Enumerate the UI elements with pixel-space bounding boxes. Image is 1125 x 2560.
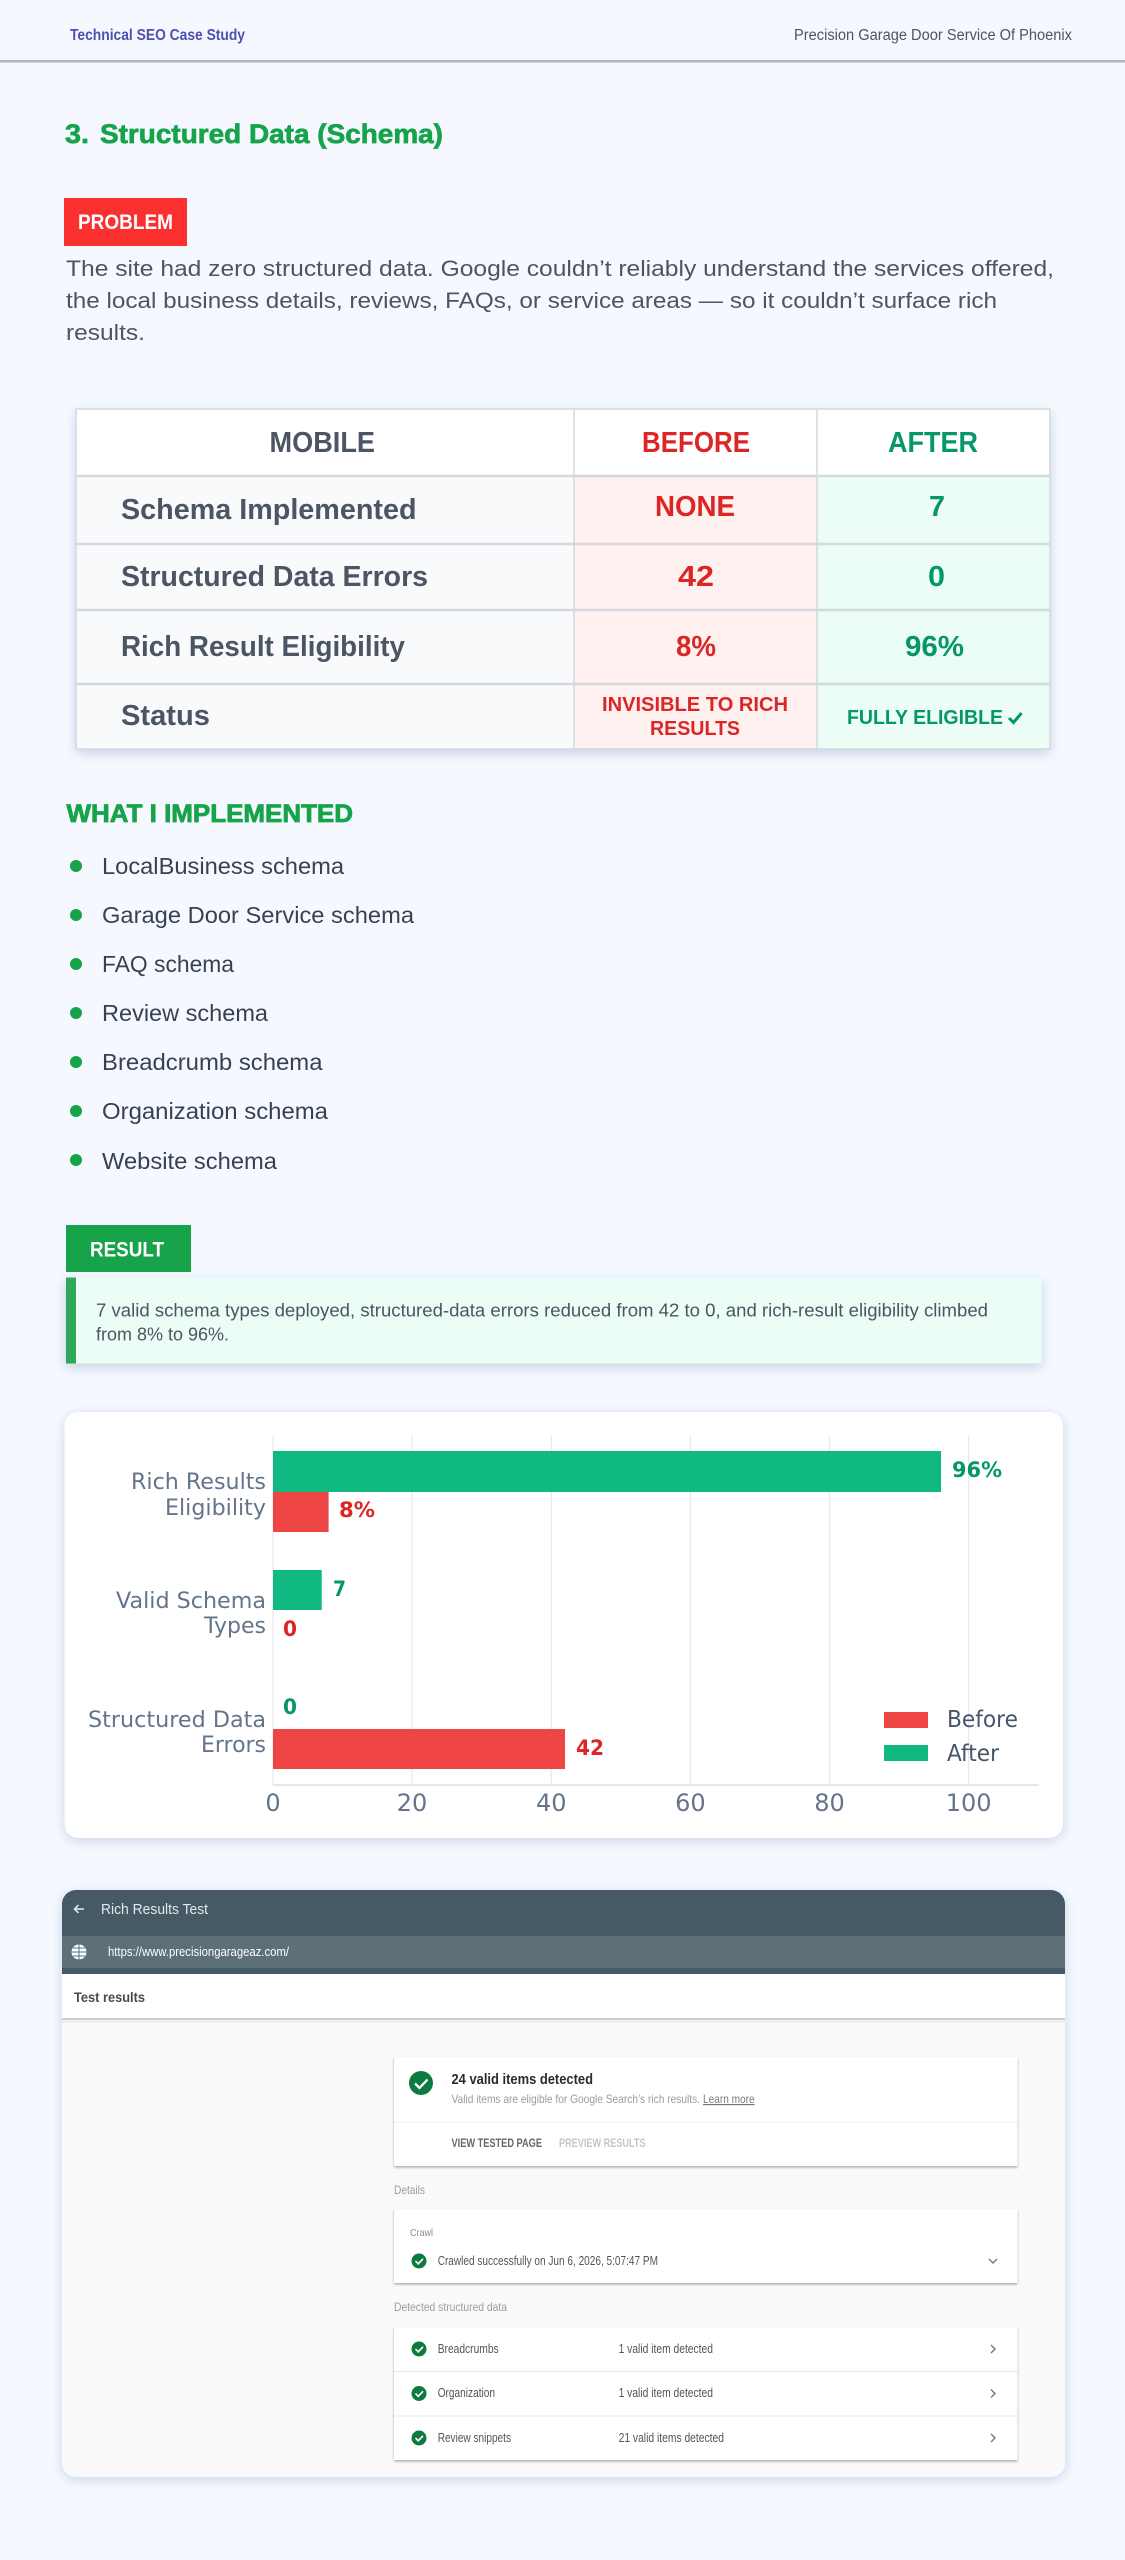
category axis labels: Valid Schema <box>116 1589 266 1614</box>
implemented list: Garage Door Service schema <box>102 902 414 928</box>
summary card: 24 valid items detected <box>452 2071 593 2088</box>
section title: 3. <box>65 119 89 149</box>
bar value labels: 0 <box>283 1617 297 1641</box>
row: breadcrumbs <box>412 2342 995 2356</box>
row: organization <box>412 2386 995 2401</box>
header label: client: Precision Garage Door Service Of Phoenix <box>794 27 1072 44</box>
bar value labels: 96% <box>952 1458 1002 1482</box>
value axis ticks: 100 <box>946 1789 992 1817</box>
value axis ticks <box>265 1789 992 1817</box>
detected data label: Detected structured data <box>394 2300 507 2314</box>
result badge <box>66 1225 191 1272</box>
bar value labels: 42 <box>576 1736 604 1760</box>
category axis labels: Structured Data <box>88 1708 266 1733</box>
row: schema implemented: Schema Implemented <box>121 494 416 526</box>
legend <box>884 1707 1018 1767</box>
implemented list: LocalBusiness schema <box>102 853 344 879</box>
crawl card <box>394 2209 1018 2283</box>
section title: Structured Data (Schema) <box>100 119 443 149</box>
crawl card: Crawl <box>410 2227 433 2239</box>
details label: Details <box>394 2183 425 2197</box>
value axis ticks: 40 <box>536 1789 567 1817</box>
result callout <box>66 1278 1042 1364</box>
panel: before/after bar chart <box>64 1412 1063 1838</box>
implemented list: FAQ schema <box>102 951 234 977</box>
test results tab: Test results <box>74 1989 145 2005</box>
result callout: from 8% to 96%. <box>96 1325 229 1345</box>
structured data card <box>394 2327 1018 2460</box>
value axis ticks: 0 <box>265 1789 281 1817</box>
bar: valid schema types <box>273 1570 322 1610</box>
category axis labels: Eligibility <box>165 1496 266 1521</box>
row: status: INVISIBLE TO RICH <box>602 694 788 716</box>
bar value labels: 7 <box>333 1577 346 1601</box>
problem text: The site had zero structured data. Google couldn’t reliably understand the services offered, <box>66 256 1054 281</box>
icon: success check <box>409 2071 433 2095</box>
panel: rich results test screenshot <box>62 1890 1065 2477</box>
row: status: Status <box>121 700 210 732</box>
value axis ticks: 60 <box>675 1789 706 1817</box>
table header row: BEFORE <box>642 427 750 459</box>
implemented list: Breadcrumb schema <box>102 1049 323 1075</box>
row: review snippets <box>412 2430 995 2446</box>
header bar <box>0 27 1125 62</box>
row: rich result eligibility: Rich Result Eligibility <box>121 631 405 663</box>
row: rich result eligibility <box>121 631 964 663</box>
row: rich result eligibility: 96% <box>905 631 964 663</box>
bar value labels: 8% <box>339 1498 375 1522</box>
header label: case study: Technical SEO Case Study <box>70 27 245 44</box>
legend: After <box>947 1741 1000 1767</box>
row: status: FULLY ELIGIBLE <box>847 707 1003 729</box>
row: structured data errors <box>121 561 945 593</box>
row: structured data errors: 42 <box>678 561 714 593</box>
bar: structured data errors <box>273 1729 565 1769</box>
table header row: MOBILE <box>270 427 375 459</box>
result callout: 7 valid schema types deployed, structured-data errors reduced from 42 to 0, and rich-result eligibility climbed <box>96 1300 988 1320</box>
toolbar: back arrow and title: Rich Results Test <box>101 1902 208 1918</box>
implemented list: Review schema <box>102 1000 268 1026</box>
row: review snippets: 21 valid items detected <box>619 2431 724 2445</box>
implemented list <box>70 853 414 1174</box>
summary card <box>394 2057 1018 2166</box>
result badge: RESULT <box>90 1238 164 1262</box>
row: schema implemented: 7 <box>929 491 945 523</box>
implemented list: Organization schema <box>102 1098 328 1124</box>
summary card: PREVIEW RESULTS <box>559 2138 646 2150</box>
problem text: the local business details, reviews, FAQs, or service areas — so it couldn’t surface rich <box>66 288 997 313</box>
row: status: RESULTS <box>650 718 740 740</box>
row: structured data errors: 0 <box>928 561 945 593</box>
summary card: Learn more <box>703 2092 755 2106</box>
bar value labels <box>283 1458 1002 1760</box>
row: breadcrumbs: 1 valid item detected <box>619 2342 713 2356</box>
problem text: results. <box>66 320 145 345</box>
category axis labels: Types <box>203 1614 266 1639</box>
row: schema implemented <box>121 491 945 526</box>
row: schema implemented: NONE <box>655 491 735 523</box>
row: review snippets: Review snippets <box>438 2431 511 2445</box>
comparison table <box>76 409 1050 749</box>
summary card: Valid items are eligible for Google Search’s rich results. <box>452 2092 700 2106</box>
implemented list: Website schema <box>102 1148 277 1174</box>
value axis ticks: 80 <box>814 1789 845 1817</box>
row: organization: 1 valid item detected <box>619 2386 713 2400</box>
row: rich result eligibility: 8% <box>676 631 716 663</box>
url bar: https://www.precisiongarageaz.com/ <box>108 1945 289 1959</box>
problem badge: PROBLEM <box>78 211 173 234</box>
category axis labels: Rich Results <box>131 1470 266 1495</box>
value axis ticks: 20 <box>397 1789 427 1817</box>
problem badge <box>64 198 187 246</box>
table header row <box>270 427 978 459</box>
bar value labels: 0 <box>283 1695 297 1719</box>
row: structured data errors: Structured Data Errors <box>121 561 428 593</box>
crawl card: Crawled successfully on Jun 6, 2026, 5:07:47 PM <box>438 2254 658 2268</box>
summary card: VIEW TESTED PAGE <box>452 2138 542 2150</box>
row: status <box>121 694 1022 740</box>
row: breadcrumbs: Breadcrumbs <box>438 2342 499 2356</box>
category axis labels: Errors <box>201 1733 266 1758</box>
problem text <box>66 256 1054 345</box>
row: organization: Organization <box>438 2386 495 2400</box>
legend: Before <box>947 1707 1018 1733</box>
table header row: AFTER <box>888 427 978 459</box>
category axis labels <box>88 1470 266 1758</box>
bars: rich results eligibility <box>273 1451 941 1532</box>
implemented heading: WHAT I IMPLEMENTED <box>66 800 353 828</box>
